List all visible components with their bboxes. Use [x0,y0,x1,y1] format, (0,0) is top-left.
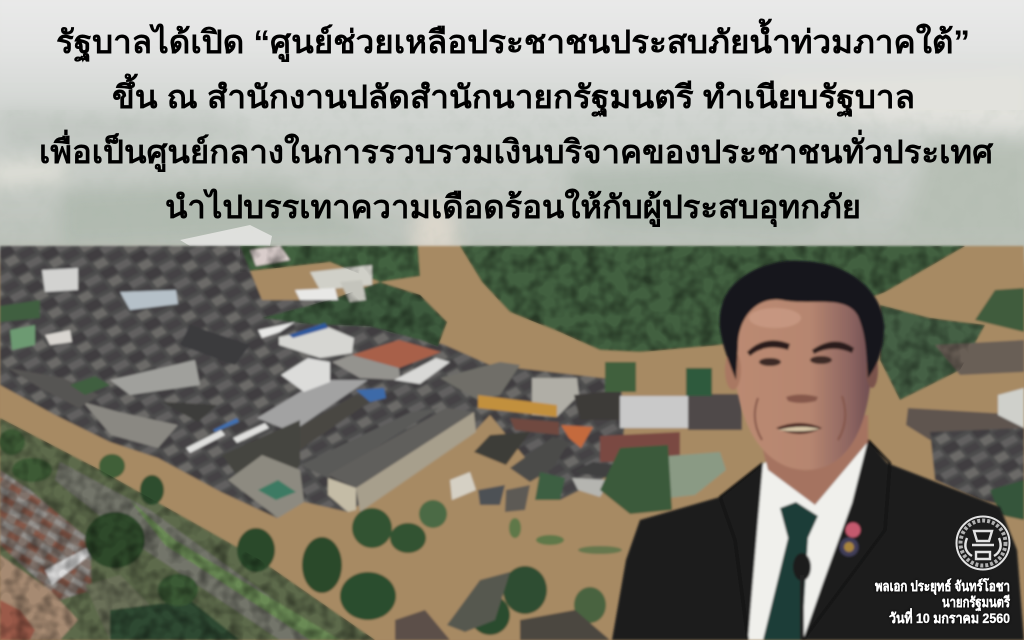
face [733,280,872,470]
far right buildings [906,408,1024,440]
person: speaking prime minister [612,261,1024,640]
neck [758,415,868,505]
photo: flooded town aerial view [0,246,1024,640]
ears [725,350,741,390]
flood water [0,246,1024,640]
hair [720,261,884,380]
icon: government seal [956,516,1010,570]
right block houses [440,362,520,400]
heading text: เพื่อเป็นศูนย์กลางในการรวบรวมเงินบริจาคของประชาชนทั่วประเทศ [39,129,994,173]
microphone [793,553,811,640]
heading text [39,18,994,228]
eyebrows, eyes, nose, mouth [747,340,854,440]
panel: pale aerial background behind heading [0,0,1024,260]
roofs [352,340,441,368]
lower left land and railway [0,418,375,640]
suit jacket [612,440,1024,640]
heading text: ขึ้น ณ สำนักงานปลัดสำนักนายกรัฐมนตรี ทำเนียบรัฐบาล [112,73,915,118]
forehead highlight [749,308,801,328]
heading text: รัฐบาลได้เปิด “ศูนย์ช่วยเหลือประชาชนประสบภัยน้ำท่วมภาคใต้” [56,18,970,63]
right riverbank trees [975,288,1024,332]
tree groups [85,512,145,568]
white shirt [748,440,868,640]
town mass [0,246,625,518]
forest island [460,246,965,352]
heading text: นำไปบรรเทาความเดือดร้อนให้กับผู้ประสบอุทกภัย [165,188,861,228]
necktie [763,502,818,640]
texture: foliage mottling [0,246,1024,640]
lapel shadows [720,440,890,640]
caption: name, title and date [875,577,1010,626]
mid trees [262,282,447,346]
pale building in distance [180,225,272,246]
lapel pins [840,522,860,556]
caption: name, title and date: วันที่ 10 มกราคม 2560 [889,608,1010,626]
upper left trees [240,246,420,282]
